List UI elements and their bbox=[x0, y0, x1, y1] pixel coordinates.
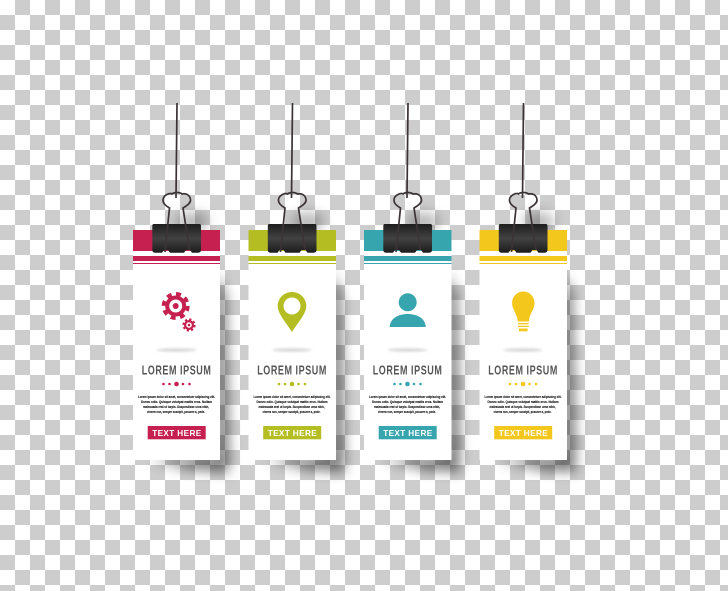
body text: malesuada erat ut turpis. Suspendisse urna nibh, bbox=[143, 404, 209, 409]
dots bbox=[393, 382, 422, 386]
card shadow bbox=[150, 212, 229, 472]
body text: viverra non, semper suscipit, posuere a, pede. bbox=[378, 409, 436, 414]
heading: LOREM IPSUM bbox=[142, 364, 211, 378]
card shadow bbox=[496, 212, 576, 472]
binder clip with hanging wire bbox=[383, 103, 432, 253]
binder clip with hanging wire bbox=[152, 103, 201, 253]
body text: viverra non, semper suscipit, posuere a, pede. bbox=[262, 409, 320, 414]
card body bbox=[133, 230, 220, 460]
body text: malesuada erat ut turpis. Suspendisse urna nibh, bbox=[490, 404, 556, 409]
card body bbox=[248, 230, 336, 460]
button: TEXT HERE bbox=[268, 429, 317, 438]
card body bbox=[480, 230, 567, 460]
icon floor shadow bbox=[156, 348, 196, 352]
icon: gears bbox=[164, 294, 194, 330]
colour header bands bbox=[133, 230, 220, 264]
button: TEXT HERE bbox=[499, 429, 548, 438]
button bbox=[379, 426, 437, 439]
card shadow bbox=[381, 212, 460, 472]
body text: malesuada erat ut turpis. Suspendisse urna nibh, bbox=[374, 404, 440, 409]
body text: viverra non, semper suscipit, posuere a, pede. bbox=[147, 409, 205, 414]
dots bbox=[278, 382, 306, 386]
icon: person bbox=[390, 293, 426, 327]
binder clip with hanging wire bbox=[268, 103, 316, 253]
button: TEXT HERE bbox=[383, 429, 433, 438]
body text: Donec odio. Quisque volutpat mattis eros. Nullam bbox=[256, 399, 328, 404]
colour header bands bbox=[480, 230, 567, 264]
card 4: yellow bulb bbox=[480, 103, 576, 472]
icon floor shadow bbox=[272, 348, 312, 352]
button bbox=[148, 426, 206, 439]
body text: Donec odio. Quisque volutpat mattis eros. Nullam bbox=[372, 399, 443, 404]
heading: LOREM IPSUM bbox=[373, 364, 442, 378]
body text bbox=[484, 394, 562, 414]
icon floor shadow bbox=[503, 348, 543, 352]
card 2: olive pin bbox=[248, 103, 344, 472]
colour header bands bbox=[248, 230, 336, 264]
icon: map pin bbox=[278, 292, 306, 332]
dots bbox=[162, 382, 191, 386]
body text: malesuada erat ut turpis. Suspendisse urna nibh, bbox=[258, 404, 324, 409]
colour header bands bbox=[364, 230, 452, 264]
body text bbox=[369, 394, 446, 414]
card 3: teal person bbox=[364, 103, 460, 472]
binder clip with hanging wire bbox=[499, 103, 548, 253]
body text: Donec odio. Quisque volutpat mattis eros. Nullam bbox=[488, 399, 559, 404]
card 1: crimson gear bbox=[133, 103, 229, 472]
body text: Donec odio. Quisque volutpat mattis eros. Nullam bbox=[141, 399, 212, 404]
dots bbox=[509, 382, 537, 386]
button bbox=[494, 426, 552, 439]
button bbox=[263, 426, 321, 439]
body text: Lorem ipsum dolor sit amet, consectetuer adipiscing elit. bbox=[369, 394, 446, 399]
card shadow bbox=[266, 212, 344, 472]
icon floor shadow bbox=[388, 348, 428, 352]
heading: LOREM IPSUM bbox=[488, 364, 557, 378]
heading: LOREM IPSUM bbox=[257, 364, 326, 378]
body text: Lorem ipsum dolor sit amet, consectetuer adipiscing elit. bbox=[138, 394, 215, 399]
body text bbox=[138, 394, 215, 414]
body text: Lorem ipsum dolor sit amet, consectetuer adipiscing elit. bbox=[254, 394, 330, 399]
button: TEXT HERE bbox=[152, 429, 202, 438]
body text: Lorem ipsum dolor sit amet, consectetuer adipiscing elit. bbox=[484, 394, 562, 399]
body text: viverra non, semper suscipit, posuere a, pede. bbox=[494, 409, 552, 414]
body text bbox=[254, 394, 330, 414]
card body bbox=[364, 230, 452, 460]
icon: light bulb bbox=[512, 292, 534, 331]
